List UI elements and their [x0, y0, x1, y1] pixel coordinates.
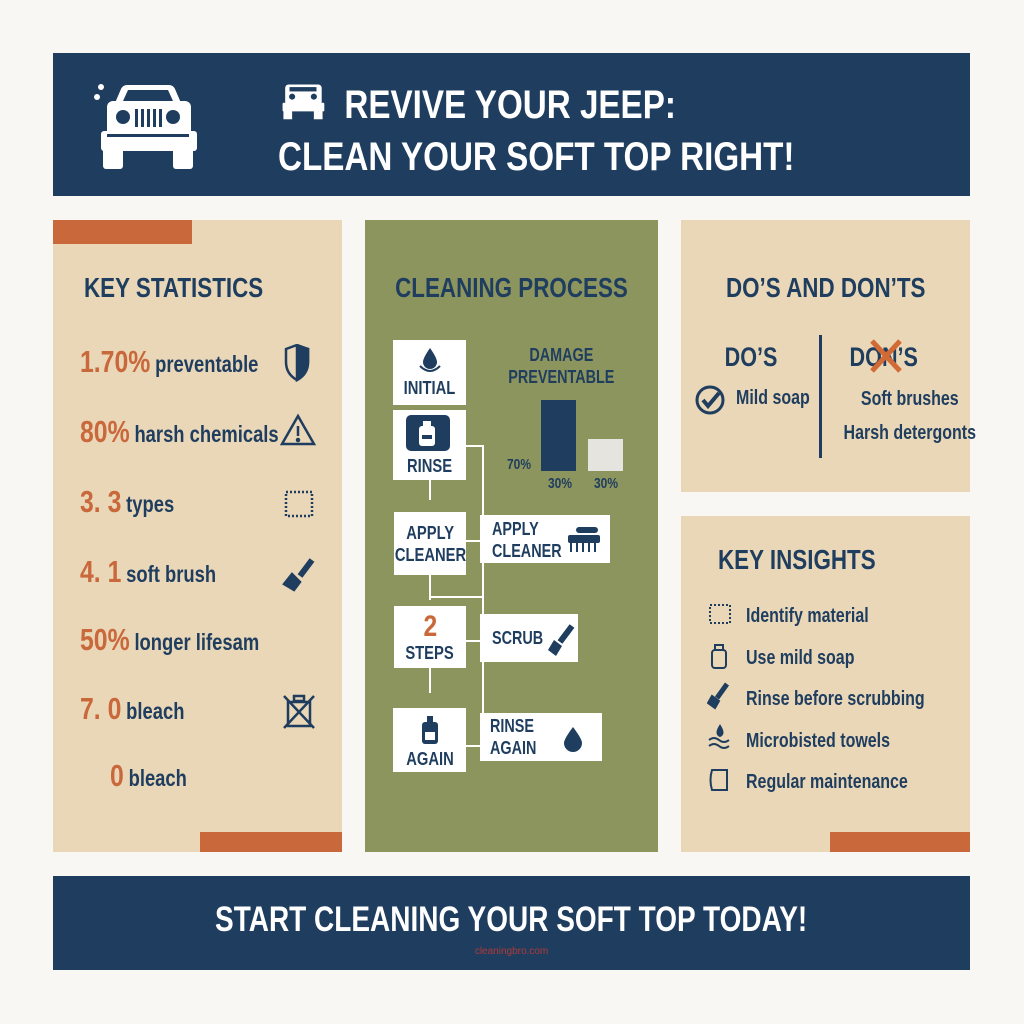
side: rinse again: AGAIN	[490, 738, 536, 758]
insights list: Regular maintenance	[746, 771, 908, 793]
side: rinse again	[480, 713, 602, 761]
text: 7. 0bleach	[80, 691, 184, 726]
don'ts column: DON’S	[850, 342, 918, 372]
step: 2 steps	[394, 606, 466, 668]
step: initial: INITIAL	[404, 378, 455, 398]
do's column: DO’S	[725, 342, 777, 372]
insights list: Rinse before scrubbing	[746, 688, 925, 710]
icon: small jeep	[282, 84, 324, 120]
side: apply cleaner: CLEANER	[492, 541, 562, 561]
credit: cleaningbro.com	[475, 946, 548, 957]
step: again	[393, 708, 466, 772]
icon: large jeep	[94, 84, 197, 169]
step: 2 steps: STEPS	[406, 643, 454, 663]
heading: CLEANING PROCESS	[395, 272, 628, 303]
bar chart: damage preventable: 30%	[548, 475, 572, 492]
panel: key statistics	[53, 220, 342, 852]
bar chart: damage preventable: 30%	[594, 475, 618, 492]
insights list: Identify material	[746, 605, 869, 627]
insights list	[707, 604, 925, 793]
step: 2 steps: 2	[423, 610, 437, 643]
panel: do's and don'ts: Mild soap	[736, 387, 810, 409]
step: rinse	[393, 410, 466, 480]
side: apply cleaner	[480, 515, 610, 563]
step: apply cleaner: CLEANER	[394, 545, 466, 565]
insights list: Use mild soap	[746, 646, 854, 668]
step: again: AGAIN	[406, 749, 453, 769]
bar chart: damage preventable: PREVENTABLE	[508, 367, 614, 387]
insights list: Microbisted towels	[746, 730, 890, 752]
text: 0bleach	[110, 758, 187, 793]
stat rows: 1.70%preventable	[80, 344, 258, 379]
panel: do's and don'ts: Harsh detergonts	[844, 422, 976, 444]
step: initial	[393, 340, 466, 405]
connector lines	[429, 480, 431, 500]
side: rinse again: RINSE	[490, 716, 534, 736]
side: scrub: SCRUB	[492, 628, 543, 648]
text: 80%harsh chemicals	[80, 414, 279, 449]
footer text: START CLEANING YOUR SOFT TOP TODAY!	[215, 900, 808, 939]
step: apply cleaner	[394, 512, 466, 575]
title: REVIVE YOUR JEEP:	[344, 83, 676, 127]
icon: cross	[870, 339, 902, 373]
panel: do's and don'ts: Soft brushes	[861, 388, 959, 410]
side: apply cleaner: APPLY	[492, 519, 539, 539]
bar chart: damage preventable: 70%	[507, 456, 531, 473]
footer banner	[53, 876, 970, 970]
title: CLEAN YOUR SOFT TOP RIGHT!	[278, 135, 794, 179]
text: 3. 3types	[80, 484, 174, 519]
panel: key insights	[681, 516, 970, 852]
title	[278, 83, 794, 179]
panel: cleaning process	[365, 220, 658, 852]
stat icons	[280, 344, 316, 729]
bar chart: damage preventable: DAMAGE	[529, 345, 593, 365]
text: 50%longer lifesam	[80, 622, 259, 657]
step: apply cleaner: APPLY	[406, 523, 454, 543]
header banner	[53, 53, 970, 196]
bar chart: damage preventable	[507, 345, 623, 492]
heading: DO’S AND DON’TS	[726, 272, 925, 303]
icon: check	[696, 386, 724, 414]
step: rinse: RINSE	[407, 456, 452, 476]
panel: do's and don'ts	[681, 220, 970, 492]
side: scrub	[480, 614, 578, 662]
heading: KEY INSIGHTS	[718, 544, 876, 575]
heading: KEY STATISTICS	[84, 272, 263, 303]
text: 4. 1soft brush	[80, 554, 216, 589]
